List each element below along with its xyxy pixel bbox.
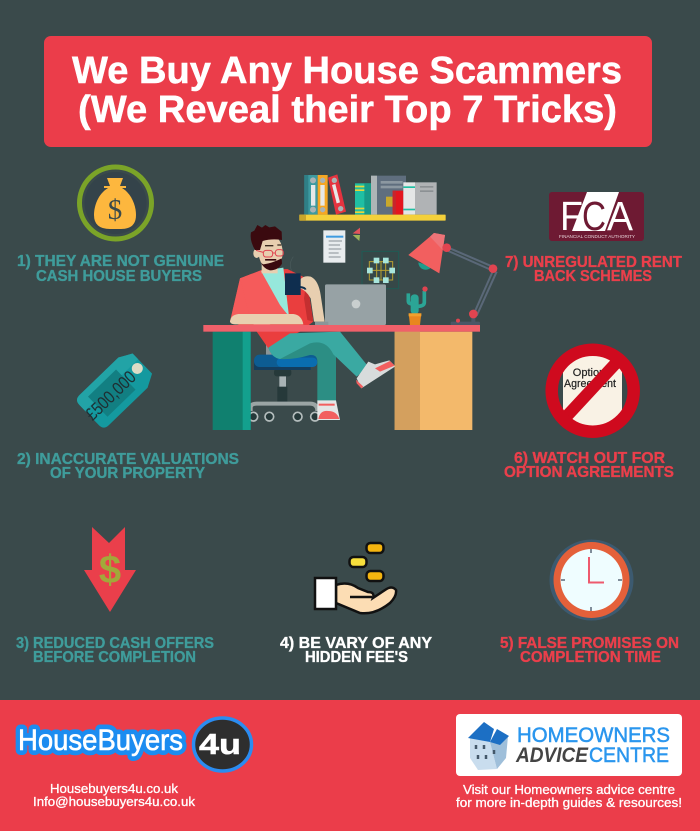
icon: down arrow with dollar: $	[99, 548, 121, 592]
label 3: BEFORE COMPLETION	[33, 649, 196, 666]
label 5: 5) FALSE PROMISES ON	[500, 635, 679, 652]
shirt	[230, 268, 313, 348]
logo: HouseBuyers4u: HouseBuyers	[18, 724, 183, 757]
icon: FCA logo: F	[560, 193, 583, 239]
label 7	[505, 254, 682, 285]
label 7: 7) UNREGULATED RENT	[505, 254, 682, 271]
logo: HouseBuyers4u: 4u	[199, 729, 241, 761]
lower leg and shoe	[268, 340, 340, 420]
man	[230, 225, 395, 420]
label 4: HIDDEN FEE'S	[305, 649, 408, 666]
label 2: 2) INACCURATE VALUATIONS	[17, 451, 239, 468]
homeowners advice text: Visit our Homeowners advice centre	[463, 782, 675, 797]
label 3: 3) REDUCED CASH OFFERS	[16, 635, 214, 652]
icon: FCA logo: FINANCIAL CONDUCT AUTHORITY	[559, 234, 635, 239]
icon: no option agreement: Option	[573, 367, 605, 379]
cactus	[408, 286, 428, 325]
label 2: OF YOUR PROPERTY	[50, 465, 205, 482]
icon: FCA logo: C	[582, 193, 606, 239]
homeowners advice text: for more in-depth guides & resources!	[456, 795, 682, 810]
desk lamp	[408, 233, 497, 325]
title banner: We Buy Any House Scammers	[72, 50, 622, 92]
logo: Homeowners Advice Centre: CENTRE	[589, 744, 669, 767]
label 1: CASH HOUSE BUYERS	[36, 268, 202, 285]
logo: Homeowners Advice Centre: ADVICE	[515, 744, 589, 767]
label 5	[500, 635, 679, 666]
icon: house	[468, 722, 509, 770]
shelf with books	[299, 174, 446, 221]
icon: money bag	[80, 167, 152, 239]
icon: no option agreement	[552, 350, 634, 435]
wall document	[323, 228, 360, 263]
illustration: man at desk	[203, 174, 497, 430]
label 7: BACK SCHEMES	[534, 268, 652, 285]
label 6: OPTION AGREEMENTS	[504, 464, 674, 481]
laptop	[315, 284, 386, 325]
homeowners advice text	[456, 782, 682, 810]
logo: Homeowners Advice Centre	[456, 714, 682, 776]
icon: clock	[550, 540, 634, 620]
footer band	[0, 700, 700, 831]
icon: FCA logo: A	[607, 193, 634, 239]
wall circuit diagram	[362, 251, 399, 289]
icon: price tag: £500,000	[81, 367, 140, 424]
label 5: COMPLETION TIME	[520, 649, 661, 666]
logo: HouseBuyers4u: HouseBuyers	[18, 724, 183, 757]
contact details: Info@housebuyers4u.co.uk	[33, 794, 196, 809]
label 1: 1) THEY ARE NOT GENUINE	[17, 253, 224, 270]
title banner: (We Reveal their Top 7 Tricks)	[78, 89, 617, 131]
label 1	[17, 253, 224, 285]
logo: HouseBuyers4u	[18, 718, 252, 771]
label 3	[16, 635, 214, 666]
icon: hand with coins	[315, 543, 396, 613]
arms and mug	[230, 257, 325, 324]
label 6	[504, 450, 674, 481]
icon: no option agreement: Agreement	[564, 378, 616, 390]
office chair	[249, 345, 319, 421]
desk	[203, 325, 480, 430]
label 4: 4) BE VARY OF ANY	[280, 635, 432, 652]
icon: price tag	[73, 348, 157, 432]
upper leg and shoe	[268, 332, 395, 388]
icon: FCA logo	[549, 192, 644, 241]
icon: down arrow with dollar	[84, 527, 136, 612]
title banner	[44, 36, 652, 147]
head	[251, 225, 283, 273]
icon: money bag: $	[108, 194, 122, 226]
label 6: 6) WATCH OUT FOR	[514, 450, 665, 467]
contact details	[33, 781, 196, 809]
label 4	[280, 635, 432, 666]
label 2	[17, 451, 239, 482]
contact details: Housebuyers4u.co.uk	[50, 781, 178, 796]
logo: Homeowners Advice Centre: HOMEOWNERS	[517, 724, 670, 747]
